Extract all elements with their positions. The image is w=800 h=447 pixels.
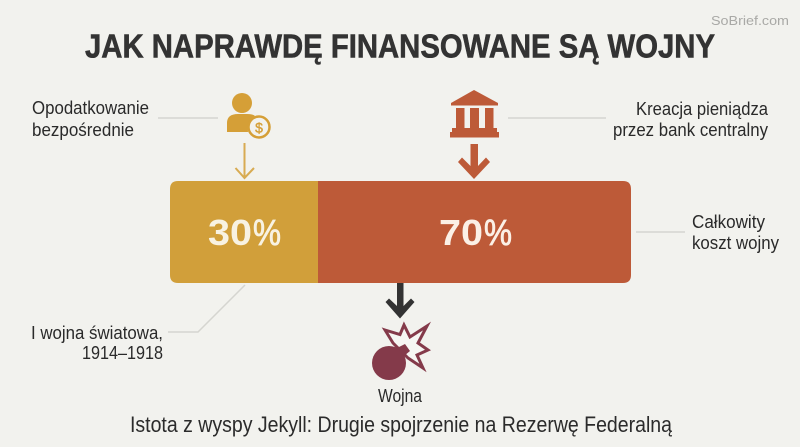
arrow: taxation down: [236, 143, 254, 178]
watermark: SoBrief.com: [711, 13, 789, 28]
title: JAK NAPRAWDĘ FINANSOWANE SĄ WOJNY: [85, 28, 715, 66]
label: total cost of war: koszt wojny: [692, 233, 779, 253]
icon: person with dollar coin: $: [255, 120, 263, 136]
leader line: World War I: [168, 285, 245, 332]
label: direct taxation: Opodatkowanie: [32, 98, 149, 118]
value: 30 percent: %: [253, 212, 281, 253]
label: central bank money creation: przez bank centralny: [613, 120, 768, 140]
icon: bomb with explosion: [372, 325, 428, 380]
arrow: central bank down: [458, 144, 490, 179]
stacked bar: [170, 181, 631, 283]
label: direct taxation: bezpośrednie: [32, 120, 134, 140]
label: total cost of war: Całkowity: [692, 212, 765, 232]
source caption: Istota z wyspy Jekyll: Drugie spojrzenie na Rezerwę Federalną: [130, 412, 673, 437]
label: central bank money creation: Kreacja pieniądza: [636, 99, 769, 119]
value: 30 percent: 30: [208, 212, 252, 253]
value: 70 percent: %: [484, 212, 512, 253]
leader line: bank: [508, 117, 606, 119]
value: 70 percent: 70: [439, 212, 483, 253]
leader line: total: [636, 231, 685, 233]
icon: central bank: [450, 90, 499, 138]
label: war: Wojna: [378, 386, 423, 406]
label: World War I: I wojna światowa,: [31, 323, 163, 343]
leader line: taxation: [158, 117, 218, 119]
label: World War I: 1914–1918: [82, 343, 163, 363]
icon: person with dollar coin: [227, 93, 270, 138]
arrow: down to war: [386, 283, 414, 318]
